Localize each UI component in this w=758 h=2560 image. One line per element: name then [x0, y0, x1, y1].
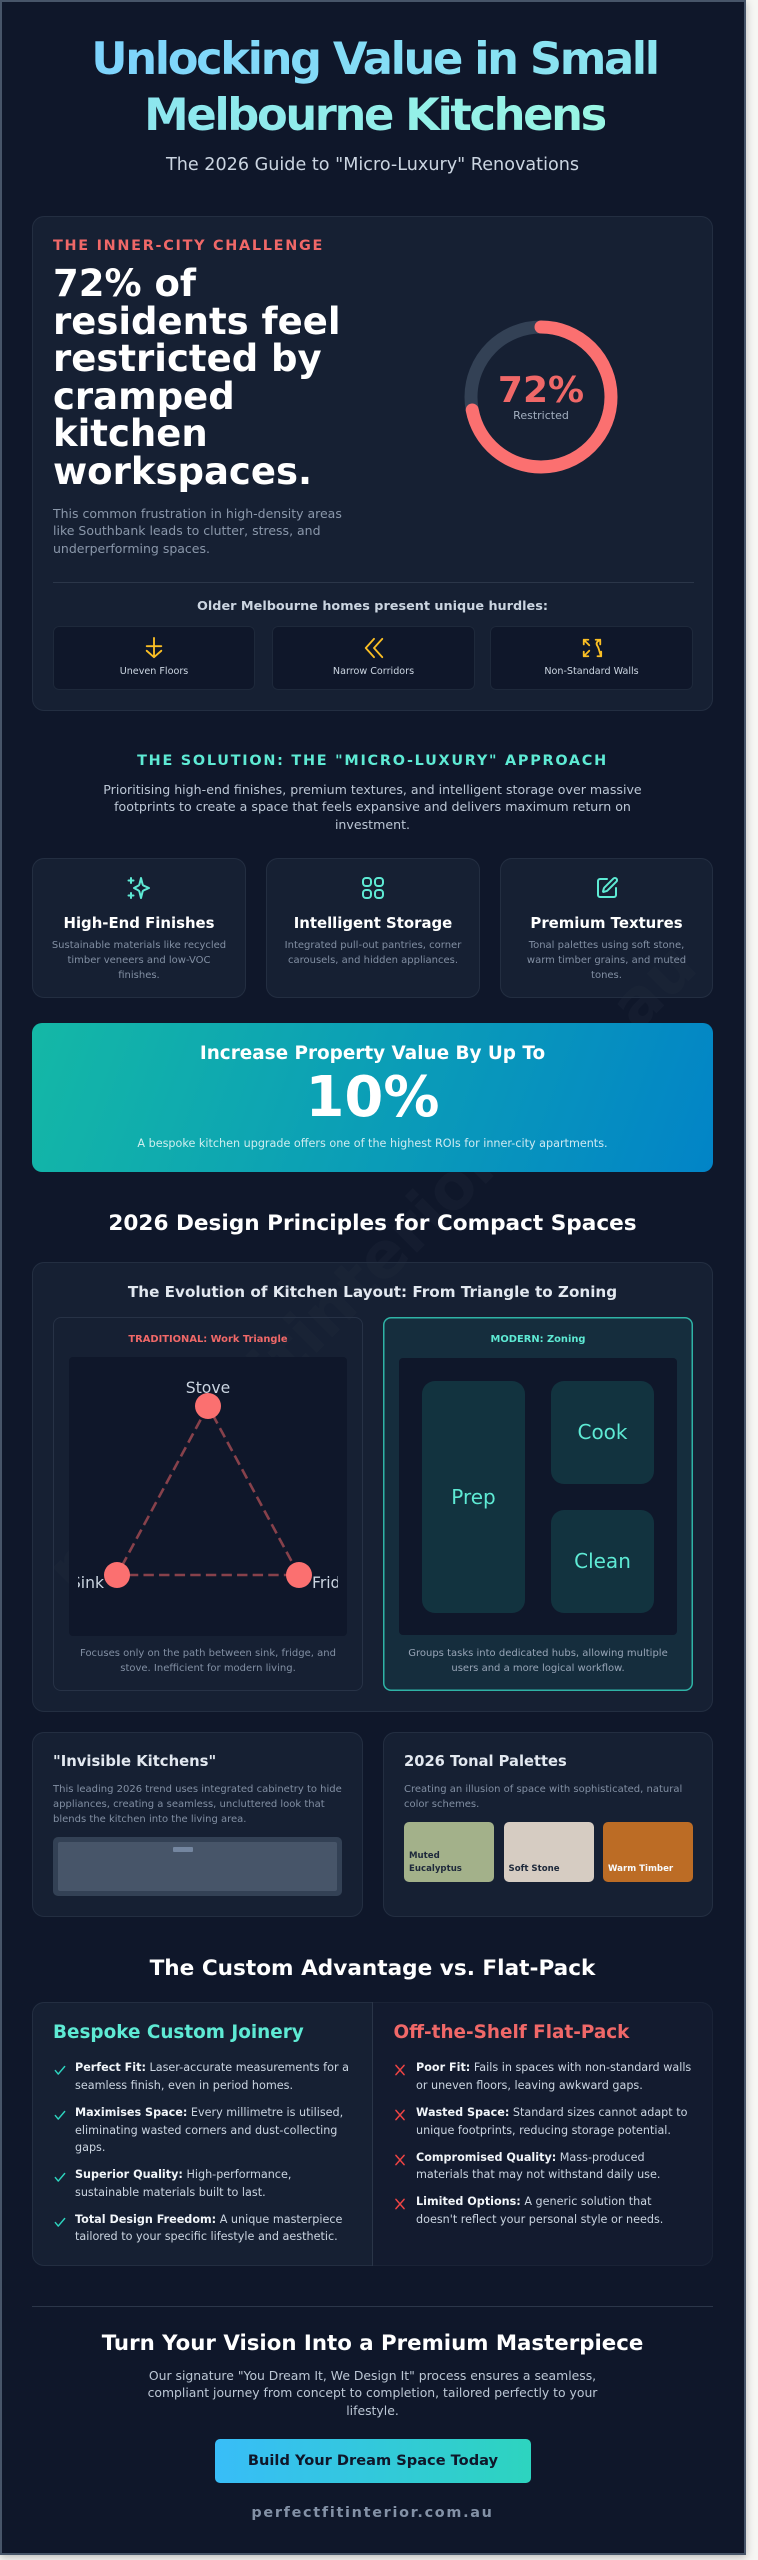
benefit: Superior Quality: High-performance, [75, 2168, 291, 2181]
cta description [148, 2368, 598, 2418]
card text [53, 1784, 342, 1824]
swatch: soft stone: Soft Stone [508, 1864, 560, 1874]
headline statistic: restricted by [53, 337, 322, 380]
benefit: eliminating wasted corners and dust-collecting [75, 2124, 337, 2136]
traditional description: stove. Inefficient for modern living. [120, 1662, 296, 1674]
modern description [408, 1648, 668, 1674]
section: the solution [103, 753, 642, 832]
benefit [54, 2061, 349, 2092]
card text: Integrated pull-out pantries, corner [285, 940, 461, 950]
card: tonal palettes [383, 1732, 713, 1917]
drawback [395, 2150, 660, 2181]
drawback: Poor Fit: Fails in spaces with non-standard walls [416, 2061, 691, 2074]
drawback [395, 2106, 687, 2136]
cta button: Build Your Dream Space Today [248, 2452, 498, 2469]
donut chart: 72% restricted: Restricted [513, 409, 569, 422]
modern label: MODERN: Zoning [491, 1334, 585, 1345]
subtitle: The 2026 Guide to "Micro-Luxury" Renovations [166, 155, 579, 175]
card text: carousels, and hidden appliances. [288, 954, 458, 966]
drawback: Limited Options: A generic solution that [416, 2195, 652, 2208]
hurdles heading: Older Melbourne homes present unique hurdles: [197, 599, 548, 614]
cta description: compliant journey from concept to completion, tailored perfectly to your [148, 2385, 597, 2400]
drawback: materials that may not withstand daily use. [416, 2168, 660, 2181]
hurdle: uneven floors [53, 626, 255, 690]
solution heading: THE SOLUTION: THE "MICRO-LUXURY" APPROACH [137, 753, 608, 769]
card text [527, 940, 686, 980]
traditional label: TRADITIONAL: Work Triangle [128, 1334, 288, 1345]
icon: sparkles [128, 877, 150, 899]
traditional description: Focuses only on the path between sink, fridge, and [80, 1648, 336, 1658]
panel: kitchen layout evolution [32, 1262, 713, 1712]
solution description: Prioritising high-end finishes, premium textures, and intelligent storage over massive [103, 782, 642, 797]
diagram: zones [399, 1358, 677, 1635]
heading: design principles: 2026 Design Principles for Compact Spaces [108, 1211, 637, 1236]
banner figure: 10% [305, 1065, 440, 1130]
drawback [395, 2195, 663, 2226]
column heading: Bespoke Custom Joinery [53, 2022, 304, 2043]
challenge description [52, 506, 342, 556]
modern description: users and a more logical workflow. [451, 1662, 625, 1674]
drawback: doesn't reflect your personal style or needs. [416, 2212, 663, 2226]
icon: double chevron [364, 638, 384, 658]
benefit: Total Design Freedom: A unique masterpiece [75, 2212, 342, 2226]
headline statistic: workspaces. [53, 450, 312, 493]
call to action [102, 2331, 643, 2521]
drawback [395, 2061, 691, 2092]
challenge description: underperforming spaces. [53, 541, 210, 556]
card title: High-End Finishes [63, 914, 215, 932]
diagram: zones: Prep [451, 1485, 496, 1509]
cta description: lifestyle. [346, 2403, 399, 2418]
card heading: "Invisible Kitchens" [53, 1753, 216, 1770]
header [91, 32, 658, 175]
drawback: Wasted Space: Standard sizes cannot adapt to [416, 2106, 687, 2119]
icon: arrow down to level [146, 637, 162, 658]
benefit [54, 2106, 343, 2154]
column: bespoke custom joinery [32, 2002, 373, 2266]
card text: color schemes. [404, 1798, 479, 1810]
card text [52, 940, 226, 980]
challenge description: like Southbank leads to clutter, stress, and [53, 523, 321, 538]
card text: timber veneers and low-VOC [67, 954, 211, 966]
illustration: integrated cabinetry [53, 1837, 342, 1896]
colour swatches [404, 1822, 693, 1882]
benefit: seamless finish, even in period homes. [75, 2078, 293, 2092]
drawback: unique footprints, reducing storage potential. [416, 2124, 671, 2136]
card text: finishes. [118, 970, 160, 980]
traditional description [80, 1648, 336, 1674]
layout: traditional work triangle [53, 1317, 363, 1691]
benefit: Maximises Space: Every millimetre is utilised, [75, 2106, 343, 2119]
icon: grid [362, 877, 384, 899]
panel: comparison [32, 2002, 713, 2266]
card text: This leading 2026 trend uses integrated cabinetry to hide [53, 1784, 342, 1794]
card text: Creating an illusion of space with sophisticated, natural [404, 1784, 682, 1794]
benefit: sustainable materials built to last. [75, 2186, 266, 2198]
card heading: 2026 Tonal Palettes [404, 1753, 567, 1770]
benefit: gaps. [75, 2141, 105, 2154]
title: Melbourne Kitchens [144, 88, 605, 141]
card text: Tonal palettes using soft stone, [529, 940, 684, 950]
hurdle: narrow corridors [272, 626, 475, 690]
card text: tones. [591, 970, 622, 980]
banner: property value [32, 1023, 713, 1172]
benefit [54, 2212, 342, 2243]
card title: Intelligent Storage [294, 914, 452, 932]
card: intelligent storage [266, 858, 480, 998]
card: premium textures [500, 858, 713, 998]
icon: skewed corners [582, 638, 602, 658]
cta button [215, 2439, 531, 2483]
column heading: Off-the-Shelf Flat-Pack [394, 2022, 629, 2043]
diagram: work triangle: Stove [186, 1378, 230, 1397]
card: high-end finishes [32, 858, 246, 998]
card text: Sustainable materials like recycled [52, 940, 226, 950]
banner note: A bespoke kitchen upgrade offers one of the highest ROIs for inner-city apartments. [137, 1137, 608, 1150]
cta description: Our signature "You Dream It, We Design It" process ensures a seamless, [149, 2368, 596, 2383]
diagram: zones: Clean [574, 1549, 631, 1573]
card text: blends the kitchen into the living area. [53, 1814, 246, 1824]
diagram: zones: Cook [577, 1420, 628, 1444]
section label: THE INNER-CITY CHALLENGE [53, 238, 324, 254]
banner heading: Increase Property Value By Up To [200, 1043, 545, 1064]
hurdle: non-standard walls [490, 626, 693, 690]
solution description [103, 782, 642, 832]
drawback: or uneven floors, leaving awkward gaps. [416, 2078, 643, 2092]
swatch: muted eucalyptus: Eucalyptus [409, 1864, 462, 1874]
swatch: muted eucalyptus: Muted [409, 1851, 440, 1861]
card text [404, 1784, 682, 1810]
swatch: warm timber [603, 1822, 693, 1882]
benefit: Perfect Fit: Laser-accurate measurements for a [75, 2061, 349, 2074]
card text: warm timber grains, and muted [527, 954, 686, 966]
title: Unlocking Value in Small [91, 32, 658, 85]
swatch: muted eucalyptus [404, 1822, 494, 1882]
benefit [54, 2168, 291, 2198]
website address: perfectfitinterior.com.au [251, 2505, 494, 2521]
layout: modern zoning [383, 1317, 693, 1691]
swatch: soft stone [504, 1822, 594, 1882]
hurdle: narrow corridors: Narrow Corridors [333, 666, 414, 677]
panel: inner-city challenge [32, 216, 713, 711]
hurdle: uneven floors: Uneven Floors [120, 666, 188, 677]
card title: Premium Textures [530, 914, 683, 932]
title [91, 32, 658, 141]
headline statistic [53, 262, 341, 493]
donut chart: 72% restricted [464, 320, 618, 474]
watermark: perfectfitinterior.com.au [33, 929, 711, 1607]
headline statistic: cramped [53, 375, 235, 418]
solution description: investment. [335, 817, 410, 832]
column: off-the-shelf flat-pack [373, 2002, 713, 2266]
drawback: Compromised Quality: Mass-produced [416, 2150, 645, 2164]
icon: pen square [597, 877, 618, 898]
hurdle: non-standard walls: Non-Standard Walls [544, 666, 639, 677]
card text [285, 940, 462, 966]
solution description: footprints to create a space that feels expansive and delivers maximum return on [114, 799, 631, 814]
donut chart: 72% restricted: 72% [498, 370, 584, 411]
card: invisible kitchens [32, 1732, 363, 1917]
headline statistic: 72% of [53, 262, 196, 305]
modern description: Groups tasks into dedicated hubs, allowing multiple [408, 1648, 668, 1658]
headline statistic: residents feel [53, 300, 341, 343]
heading: custom vs flat-pack: The Custom Advantage vs. Flat-Pack [150, 1956, 595, 1981]
cta heading: Turn Your Vision Into a Premium Masterpiece [102, 2331, 643, 2356]
challenge description: This common frustration in high-density areas [53, 506, 342, 521]
headline statistic: kitchen [53, 412, 208, 455]
diagram: work triangle [69, 1357, 347, 1636]
card text: appliances, creating a seamless, uncluttered look that [53, 1798, 325, 1810]
panel heading: The Evolution of Kitchen Layout: From Triangle to Zoning [128, 1283, 617, 1301]
benefit: tailored to your specific lifestyle and aesthetic. [75, 2230, 338, 2243]
swatch: warm timber: Warm Timber [608, 1864, 673, 1874]
